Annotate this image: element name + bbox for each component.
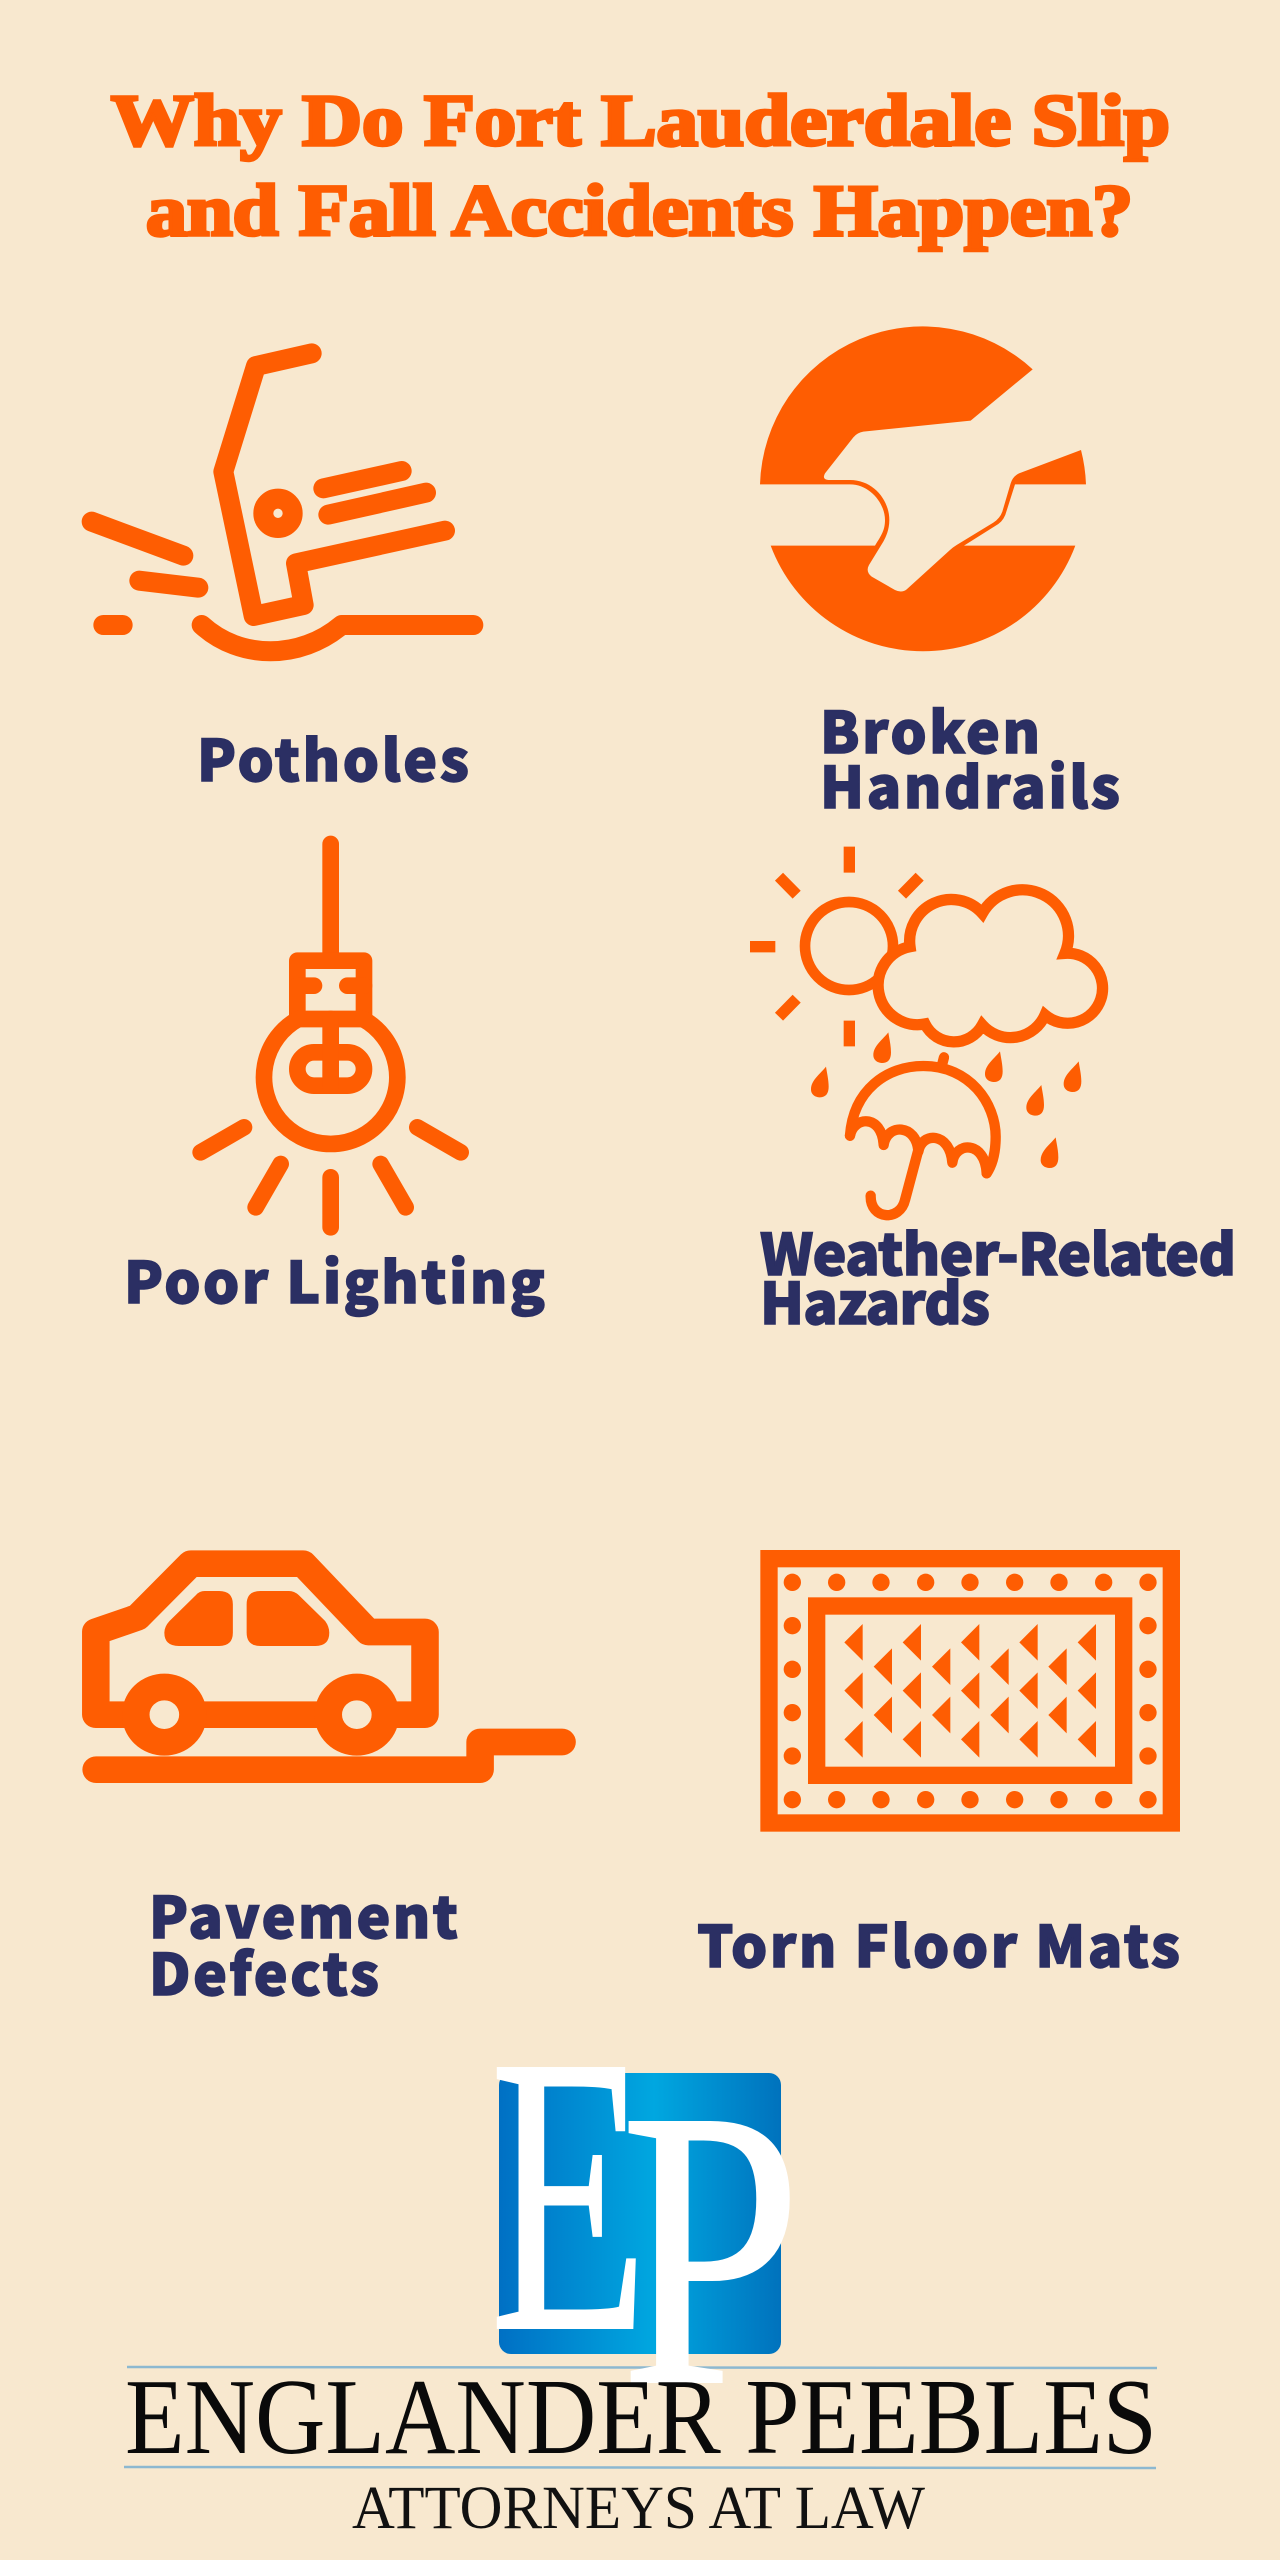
icon: car on uneven pavement (96, 1564, 562, 1770)
logo blue panel (499, 2073, 781, 2354)
logo firm name: ENGLANDER PEEBLES (125, 2358, 1157, 2477)
label: Weather-Related Hazards: Weather-Related (760, 1210, 1236, 1292)
title: Why Do Fort Lauderdale Slip (111, 80, 1170, 161)
label: Torn Floor Mats: Torn Floor Mats (697, 1902, 1180, 1984)
label: Broken Handrails (820, 688, 1120, 825)
label: Poor Lighting: Poor Lighting (124, 1238, 545, 1320)
logo monogram (490, 1974, 802, 2468)
icon: sun, cloud, rain and umbrella (750, 847, 1103, 1215)
label: Pavement Defects (149, 1873, 458, 2012)
label: Broken Handrails: Broken (820, 688, 1040, 770)
label: Potholes: Potholes (197, 716, 469, 798)
logo monogram: P (620, 2028, 802, 2468)
icon: person falling in pothole (92, 353, 473, 651)
logo: Englander Peebles Attorneys at Law (124, 1974, 1157, 2542)
label: Broken Handrails: Handrails (820, 743, 1120, 825)
icon: hanging light bulb (201, 844, 461, 1227)
title (111, 80, 1170, 251)
logo monogram: E (490, 1974, 648, 2414)
logo rules (124, 2367, 1157, 2468)
logo tagline: ATTORNEYS AT LAW (352, 2475, 925, 2542)
label: Pavement Defects: Pavement (149, 1873, 458, 1955)
icon: hand on broken handrail (760, 326, 1086, 651)
label: Weather-Related Hazards (760, 1210, 1236, 1341)
label: Weather-Related Hazards: Hazards (760, 1259, 990, 1341)
icon: patterned floor mat (769, 1559, 1171, 1823)
label: Pavement Defects: Defects (149, 1930, 379, 2012)
title: and Fall Accidents Happen? (146, 170, 1133, 251)
